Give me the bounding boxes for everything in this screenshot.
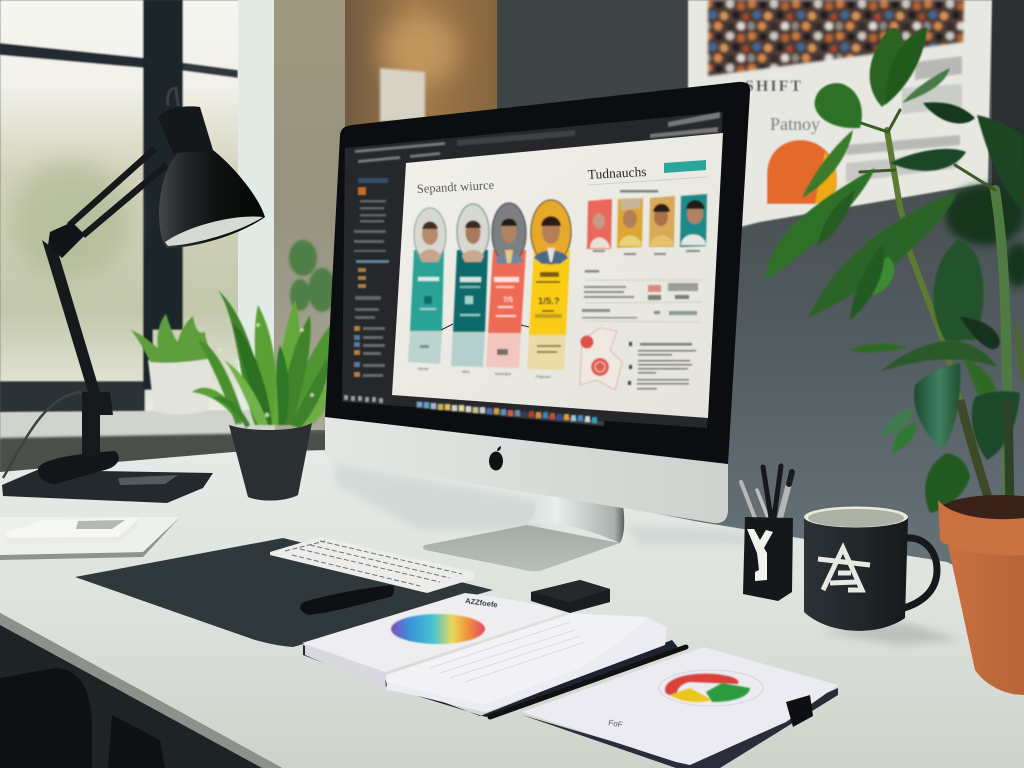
desk front edge [0,613,282,768]
mug [804,506,960,645]
page heading: AZZfoefe [465,596,498,610]
leaf small upper [902,68,950,103]
leaf dark center [960,317,1000,349]
leaf mid back [963,357,997,397]
screen right divider [588,177,707,185]
poster on wall [688,0,992,240]
pot body [948,545,1024,695]
stem lower overlay [960,400,993,515]
card 3 coral: Nochngos [495,372,511,376]
poster text lines [846,56,962,182]
leaf low center [893,423,917,453]
poster crowd photo [708,0,964,76]
open notebook [302,593,680,717]
background: wall lamp [380,68,425,122]
poster heading: SHIFT [745,78,803,95]
leaf mid left [850,245,884,320]
leaf right top [923,102,975,123]
black hub box [531,580,610,613]
closed notebook bottom cover [522,688,838,768]
apple logo mark [489,446,503,470]
elastic clip [786,695,813,727]
device screen [76,520,125,529]
card 2 dark teal [451,204,489,374]
keyboard key rows [285,541,462,586]
leaf right top long [977,115,1024,210]
leaf small bright [867,257,894,296]
leaf top right [885,27,927,105]
screen map diagram [580,328,622,390]
notebook shadow cover [303,640,680,717]
lamp cable [3,392,82,478]
plant bokeh highlights [218,323,314,418]
stem right lower [1008,400,1010,510]
lamp platform [2,470,213,503]
device top [5,518,140,538]
leaf low small [880,407,913,437]
pot interior [940,495,1024,525]
screen left sidebar [344,178,389,403]
background: grey wall [0,0,1024,600]
lamp shade [159,150,265,248]
card 1 teal [408,208,446,371]
color logo [665,674,750,702]
screen UI dark background [342,112,723,428]
leaf far right [1016,320,1024,385]
screen info table [582,270,702,322]
office chair [0,668,165,768]
desk surface [0,450,1024,768]
plant foliage [192,290,333,428]
screen document page [392,133,723,418]
white device [5,518,140,544]
mug body [804,518,908,631]
mug inner [808,509,904,527]
portrait row [587,190,707,255]
card 2 dark teal: Nfize [462,370,470,374]
leaf shiny center [914,363,960,450]
holder body [743,517,793,601]
mouse pad [75,538,493,647]
plant stems [858,110,1007,510]
color wheel [391,614,485,644]
card 1 teal: Mhuve [418,367,429,371]
lamp base [38,451,119,484]
leaf center right [933,240,983,340]
keyboard [270,537,475,593]
small plant pot [148,358,212,414]
leaf upper left [815,83,862,128]
paper and tablet on desk [0,517,180,560]
leaf top left [870,28,903,107]
portrait teal [680,194,707,252]
holder logo [747,529,773,581]
lamp neck cap [158,106,213,158]
floor and dark area below desk [0,600,300,768]
pot rim [938,500,1024,556]
background: window foliage haze [10,160,130,280]
portrait coral [587,199,612,252]
turned page [386,614,647,704]
page text lines [430,622,585,682]
leaf left lower [817,190,855,247]
card 3 coral [486,203,526,376]
desk shadow under monitor [335,462,760,545]
lamp upper arm rods [67,146,168,238]
card connectors [441,324,529,330]
lamp platform grille [118,475,178,485]
closed notebook top [522,647,838,765]
card 3 coral: 7/5 [503,297,513,304]
leaf center large [808,192,957,318]
card 4 yellow: 1/5.? [538,296,560,307]
screen top toolbar bits [355,112,720,163]
large plant [765,27,1024,515]
pen holder [741,466,793,601]
closed notebook [522,647,838,768]
plant pot [229,423,312,501]
pens [741,466,792,518]
black pens between notebooks [490,647,686,717]
lamp arm joint [48,222,85,258]
under-sill shadow [0,432,330,490]
main green plant [192,290,333,501]
card 4 yellow: Phjanoes [536,375,551,379]
back foliage mass [945,132,1024,287]
leaf above pot [925,453,970,513]
screen dock [416,401,604,426]
card 4 yellow [527,200,571,379]
leaf pointing left thin [802,130,853,198]
screen heading right: Tudnauchs [587,164,647,182]
background: white window reveal and side wall [238,0,1024,430]
blurred back plant [289,240,336,312]
portrait tan [649,196,675,255]
leaves [765,27,1024,513]
screen numbered list [628,342,696,390]
leaf lower right [972,391,1020,460]
desk lamp [2,88,265,503]
leaf left big [765,168,875,280]
small white-potted plant on sill [131,314,214,414]
small plant leaves [131,314,214,363]
lamp hook [167,88,178,106]
color logo ring [659,670,763,706]
small label: FoF [608,718,623,729]
lamp lower arm [42,240,113,458]
leaf thin left [848,344,907,353]
right page [386,613,667,712]
leaf mid thin [880,340,997,372]
background: window [0,0,240,415]
terracotta pot [938,495,1024,695]
mug handle [896,538,937,610]
mug shadow [820,622,960,645]
screen heading left: Sepandt wiurce [416,178,495,196]
monitor bezel [325,82,750,464]
leaf center top [890,149,966,171]
portrait yellow [617,198,643,255]
lamp shade inner light [165,217,263,246]
mug logo [818,548,870,590]
poster yellow segment [815,152,837,204]
left page [302,593,565,672]
poster subheading: Patnoy [770,114,820,134]
mug rim [804,506,908,528]
monitor chin [325,415,728,523]
teal button [664,160,706,173]
stylus pen [300,585,394,615]
monitor [325,82,750,571]
paper pad [0,517,180,558]
monitor stand neck [527,490,624,543]
monitor stand foot [423,525,620,571]
left page edge [305,645,386,690]
poster orange arch [767,140,837,204]
window sill [0,410,275,440]
